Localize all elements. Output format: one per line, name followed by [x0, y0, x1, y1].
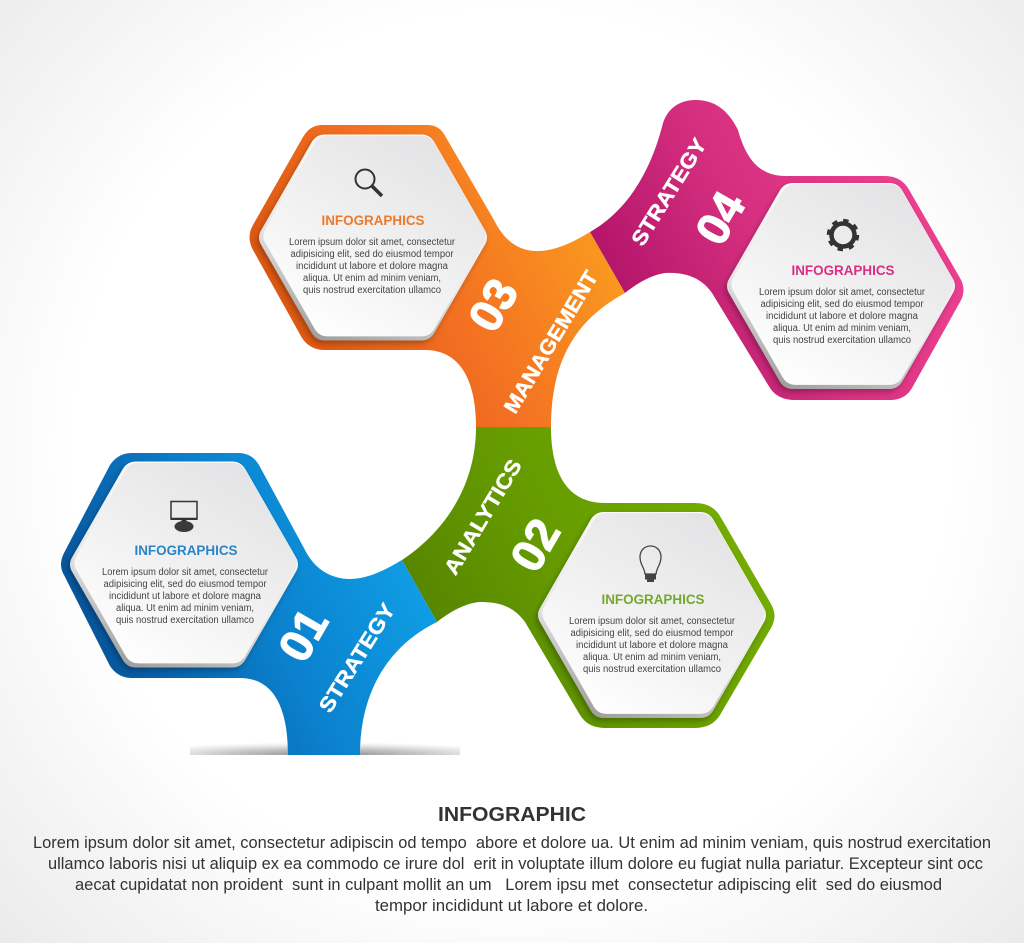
orange ribbon and hexagon [250, 125, 625, 427]
body text: quis nostrud exercitation ullamco [116, 615, 254, 626]
hexagon card [538, 512, 766, 718]
panel: 02 analytics [402, 427, 774, 728]
body text: Lorem ipsum dolor sit amet, consectetur [102, 567, 269, 578]
heading: INFOGRAPHICS [602, 592, 704, 607]
label analytics: ANALYTICS [440, 456, 527, 579]
body text: aliqua. Ut enim ad minim veniam, [773, 323, 911, 334]
hexagon card [727, 183, 955, 389]
body text: aliqua. Ut enim ad minim veniam, [116, 603, 254, 614]
body text: Lorem ipsum dolor sit amet, consectetur [289, 237, 456, 248]
footer text block: tempor incididunt ut labore et dolore. [375, 897, 648, 915]
body text: adipisicing elit, sed do eiusmod tempor [570, 628, 734, 639]
heading: INFOGRAPHICS [134, 543, 238, 558]
ground shadow under stem [190, 738, 460, 755]
body text: incididunt ut labore et dolore magna [109, 591, 261, 602]
body text: aliqua. Ut enim ad minim veniam, [303, 273, 441, 284]
body text: incididunt ut labore et dolore magna [296, 261, 448, 272]
body text: Lorem ipsum dolor sit amet, consectetur [569, 616, 736, 627]
hexagon card [259, 134, 487, 340]
body text: adipisicing elit, sed do eiusmod tempor [290, 249, 454, 260]
label strategy: STRATEGY [315, 600, 400, 717]
body text: incididunt ut labore et dolore magna [576, 640, 728, 651]
body text: Lorem ipsum dolor sit amet, consectetur [759, 287, 926, 298]
footer title: INFOGRAPHIC [438, 804, 586, 826]
body text: quis nostrud exercitation ullamco [583, 664, 721, 675]
footer text block: ullamco laboris nisi ut aliquip ex ea commodo ce irure dol erit in voluptate illum dolore eu fugiat nulla pariatur. Excepteur sint occ [48, 855, 983, 873]
footer text block: aecat cupidatat non proident sunt in culpant mollit an um Lorem ipsu met consectetur adipiscing elit sed do eiusmod [75, 876, 942, 894]
hexagon card [70, 462, 298, 668]
label strategy: STRATEGY [627, 134, 712, 250]
body text [569, 616, 736, 675]
number 04: 04 [685, 182, 756, 253]
body text: aliqua. Ut enim ad minim veniam, [583, 652, 721, 663]
panel: 04 strategy [590, 100, 964, 400]
icon: light bulb [640, 546, 661, 582]
footer text block [33, 834, 991, 915]
body text [289, 237, 456, 296]
number 03: 03 [458, 270, 528, 340]
body text: incididunt ut labore et dolore magna [766, 311, 918, 322]
icon: monitor [170, 502, 198, 532]
panel: 01 strategy [61, 453, 437, 755]
body text: adipisicing elit, sed do eiusmod tempor [104, 579, 267, 590]
panel: 03 management [250, 125, 625, 427]
body text [759, 287, 926, 346]
number 02: 02 [500, 510, 570, 580]
number 01: 01 [268, 600, 338, 670]
body text: adipisicing elit, sed do eiusmod tempor [760, 299, 924, 310]
body text [102, 567, 269, 626]
body text: quis nostrud exercitation ullamco [773, 335, 911, 346]
body text: quis nostrud exercitation ullamco [303, 285, 441, 296]
icon: gear [828, 220, 858, 250]
icon: magnifier [356, 170, 382, 196]
label management: MANAGEMENT [500, 267, 603, 418]
heading: INFOGRAPHICS [322, 213, 424, 228]
heading: INFOGRAPHICS [792, 263, 894, 278]
footer text block: Lorem ipsum dolor sit amet, consectetur adipiscin od tempo abore et dolore ua. Ut enim ad minim veniam, quis nostrud exercitation [33, 834, 991, 852]
blue ribbon and hexagon [61, 453, 437, 755]
magenta ribbon and hexagon [590, 100, 964, 400]
green ribbon and hexagon [402, 427, 774, 728]
